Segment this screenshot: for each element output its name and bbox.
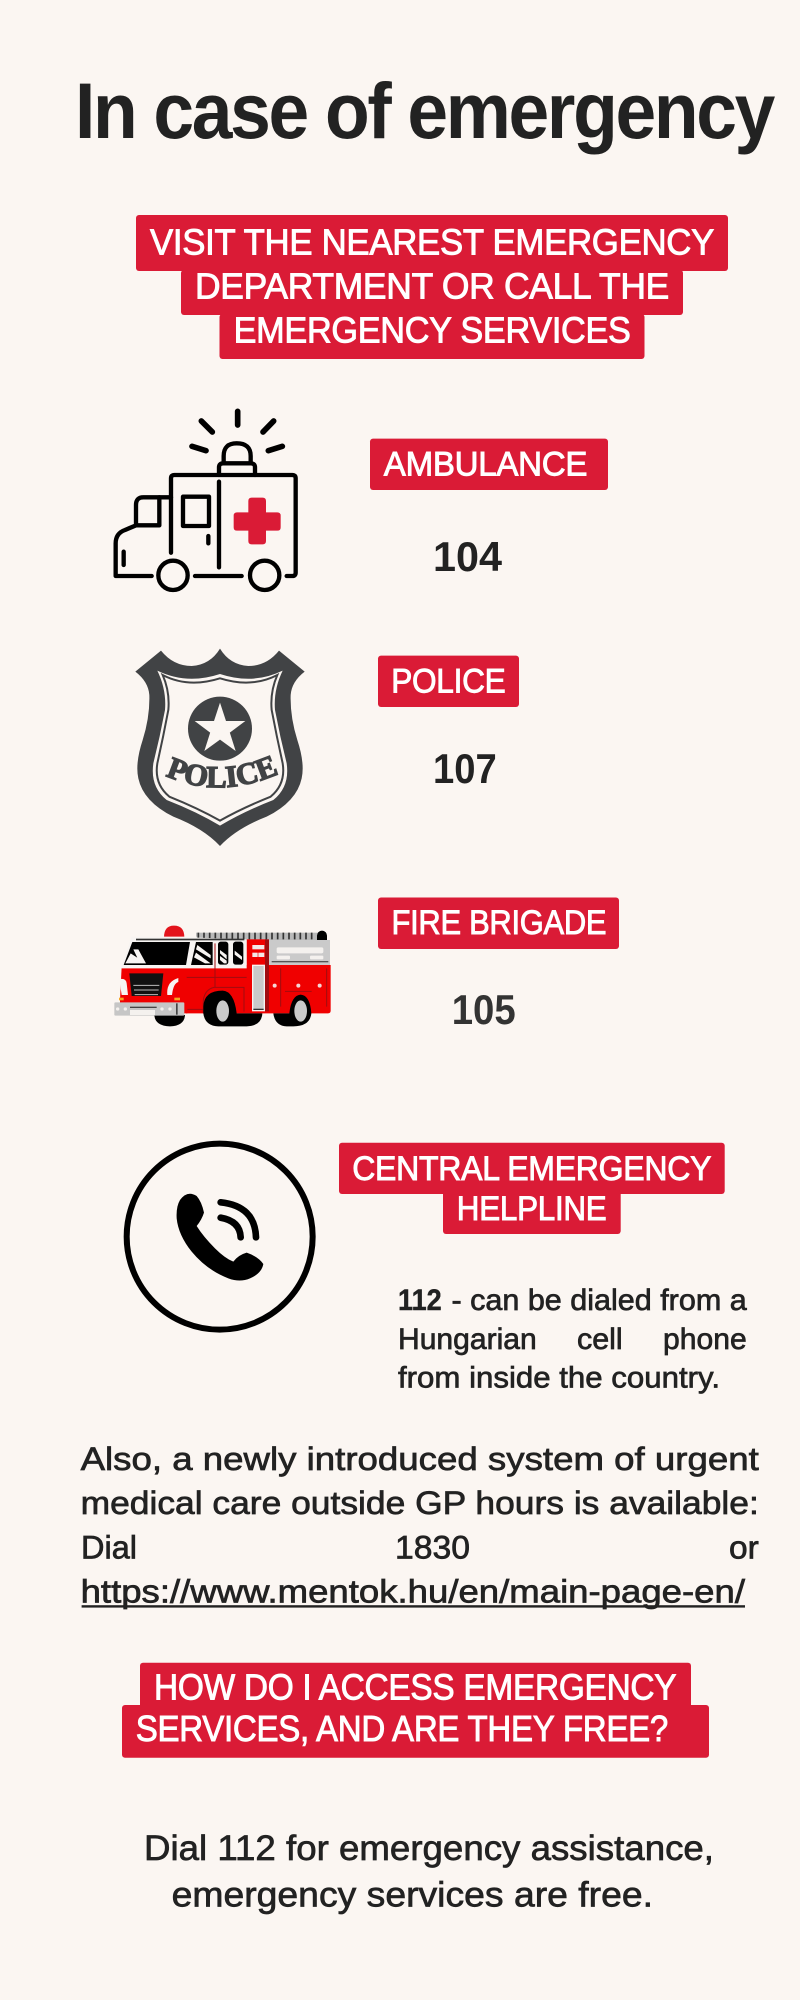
- text block: urgent medical care outside GP hours: medical care outside GP hours is available:: [81, 1485, 759, 1521]
- callout: visit the nearest emergency department: DEPARTMENT OR CALL THE: [195, 265, 669, 306]
- callout: visit the nearest emergency department: [136, 215, 728, 359]
- text block: urgent medical care outside GP hours: https://www.mentok.hu/en/main-page-en/: [81, 1573, 746, 1609]
- icon: ambulance: [116, 411, 296, 590]
- text block: 112 helpline details: - can be dialed from a: [452, 1284, 747, 1317]
- text block: 112 helpline details: Hungarian: [398, 1323, 537, 1356]
- icon: police badge: POLICE: [165, 755, 278, 788]
- text block: dial 112: Dial 112 for emergency assistance,: [144, 1828, 714, 1868]
- text block: urgent medical care outside GP hours: Also, a newly introduced system of urgent: [81, 1441, 759, 1477]
- label: central emergency helpline: CENTRAL EMERGENCY: [352, 1150, 711, 1188]
- callout: visit the nearest emergency department: EMERGENCY SERVICES: [234, 310, 631, 351]
- label: central emergency helpline: [339, 1143, 725, 1234]
- text block: urgent medical care outside GP hours: [81, 1441, 759, 1609]
- label: ambulance: AMBULANCE: [384, 445, 587, 483]
- number: 104: 104: [433, 533, 503, 580]
- text block: urgent medical care outside GP hours: or: [729, 1530, 759, 1566]
- text block: dial 112: emergency services are free.: [172, 1875, 653, 1915]
- number: 105: 105: [452, 986, 516, 1033]
- label: police: POLICE: [391, 662, 506, 700]
- text block: 112 helpline details: phone: [663, 1323, 747, 1356]
- text block: 112 helpline details: cell: [577, 1323, 623, 1356]
- icon: police badge: [135, 648, 305, 846]
- text block: dial 112: [144, 1828, 714, 1915]
- icon: phone in circle: [127, 1144, 313, 1330]
- text block: 112 helpline details: from inside the country.: [398, 1361, 720, 1394]
- callout: how do I access emergency services: [122, 1663, 709, 1758]
- label: fire brigade: FIRE BRIGADE: [392, 904, 606, 942]
- text block: 112 helpline details: 112: [398, 1284, 442, 1317]
- label: police: [378, 656, 519, 707]
- label: fire brigade: [378, 898, 619, 949]
- callout: how do I access emergency services: SERVICES, AND ARE THEY FREE?: [136, 1708, 668, 1749]
- number: 107: 107: [433, 745, 497, 792]
- label: ambulance: [370, 439, 608, 490]
- callout: visit the nearest emergency department: VISIT THE NEAREST EMERGENCY: [150, 221, 714, 262]
- icon: fire truck: [114, 926, 331, 1026]
- text block: urgent medical care outside GP hours: Dial: [81, 1530, 137, 1566]
- callout: how do I access emergency services: HOW DO I ACCESS EMERGENCY: [154, 1666, 677, 1707]
- text block: 112 helpline details: [398, 1284, 747, 1394]
- label: central emergency helpline: HELPLINE: [457, 1190, 606, 1228]
- text block: urgent medical care outside GP hours: 1830: [395, 1530, 470, 1566]
